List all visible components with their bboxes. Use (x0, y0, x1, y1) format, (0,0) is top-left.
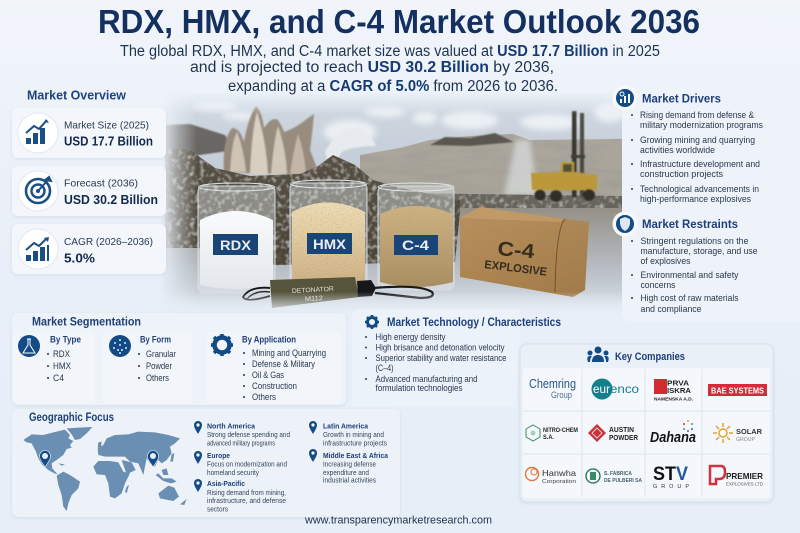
logo: Premier Explosives: EXPLOSIVES LTD (726, 482, 764, 486)
subtitle text block: and is projected to reach USD 30.2 Billion by 2036, (190, 59, 554, 76)
card: by type (13, 332, 95, 403)
card: by application: Defense & Military (252, 359, 315, 369)
logo: STV Group: G R O U P (653, 484, 689, 490)
panel: drivers and restraints (612, 86, 800, 322)
card: market size (12, 108, 166, 158)
logo: Hanwha: Corporation (542, 479, 576, 485)
region list: right column: infrastructure projects (323, 440, 387, 448)
logo: Prva Iskra: ISKRA (667, 388, 691, 395)
card: by form: Granular (146, 349, 176, 359)
subtitle text block: The global RDX, HMX, and C-4 market size was valued at USD 17.7 Billion in 2025 (120, 43, 660, 60)
panel: market overview (12, 88, 166, 274)
region list: left column: Europe (207, 451, 230, 460)
drill rig (531, 111, 597, 202)
card: forecast: Forecast (2036) (64, 178, 138, 190)
logo: Prva Iskra (654, 379, 693, 402)
list: market drivers (631, 110, 763, 204)
jar: RDX: RDX (220, 238, 251, 253)
logo: Hanwha (526, 468, 576, 485)
panel: key companies (520, 344, 773, 502)
card: by application: Mining and Quarrying (252, 348, 326, 358)
region list: left column: sectors (207, 506, 228, 514)
logo: Solar Group: GROUP (736, 437, 755, 443)
logo: Dahana (650, 420, 696, 446)
card: forecast: USD 30.2 Billion (64, 192, 158, 207)
card: cagr (12, 224, 166, 274)
logo: Austin Powder (588, 424, 639, 442)
heading: market technology: Market Technology / Characteristics (387, 315, 561, 329)
card: by application: Construction (252, 381, 297, 391)
list: technologies: formulation technologies (376, 383, 463, 393)
subtitle text block: expanding at a CAGR of 5.0% from 2026 to 2036. (228, 78, 558, 95)
world map (23, 427, 187, 511)
card: by application (206, 332, 342, 403)
list: technologies: Superior stability and water resistance (376, 353, 506, 363)
detonator M112: M112 (305, 295, 324, 303)
heading: market segmentation: Market Segmentation (32, 315, 141, 329)
logo: STV Group: STV (653, 464, 688, 485)
logo: S. Fabrica (586, 469, 642, 484)
region list: left column: Strong defense spending and (207, 432, 290, 439)
list: market drivers: activities worldwide (640, 145, 715, 155)
card: market size: USD 17.7 Billion (64, 134, 153, 149)
logo: Premier Explosives (710, 466, 764, 486)
region list: left column (194, 421, 290, 514)
heading: market overview: Market Overview (27, 88, 126, 102)
logo: Austin Powder: POWDER (609, 433, 639, 442)
card: by form: By Form (140, 335, 171, 346)
list: market drivers: Technological advancements in (640, 184, 759, 194)
card: by type: RDX (53, 349, 70, 359)
list: market restraints: Stringent regulations on the (640, 236, 748, 246)
detonator M112 (243, 277, 433, 308)
logo: Chemring: Chemring (529, 376, 576, 391)
C-4 explosive bag: C-4 (497, 238, 536, 263)
list: market restraints: of explosives (640, 256, 691, 266)
card: forecast (12, 166, 166, 216)
jar: HMX (290, 180, 367, 291)
dust column (504, 140, 538, 196)
card: by application: Oil & Gas (252, 370, 284, 380)
jar: RDX (198, 183, 275, 293)
logo: Solar Group (713, 423, 763, 443)
logo: Prva Iskra: PRVA (667, 380, 689, 388)
heading: geographic focus: Geographic Focus (29, 410, 114, 424)
list: market restraints: High cost of raw materials (640, 293, 739, 303)
logo: Nitro-Chem: S.A. (543, 434, 554, 441)
jar: C-4 (378, 183, 454, 290)
icon: market restraints (612, 212, 638, 236)
card: cagr: CAGR (2026–2036) (64, 236, 153, 248)
icon: people (587, 346, 609, 362)
logo: Hanwha: Hanwha (542, 468, 576, 478)
panel: market technology (352, 310, 561, 407)
region list: left column: North America (207, 422, 256, 431)
list: market drivers: Growing mining and quarrying (640, 135, 755, 145)
card: by form (103, 332, 192, 403)
C-4 explosive bag (460, 207, 589, 297)
ground (150, 208, 630, 314)
region list: left column: Asia-Pacific (207, 479, 245, 488)
logo: Solar Group: SOLAR (736, 427, 763, 436)
logo: Eurenco: eur (593, 384, 610, 396)
card: by application: Others (252, 392, 276, 402)
region list: right column: Increasing defense (323, 462, 376, 469)
logo: Premier Explosives: PREMIER (726, 471, 763, 481)
region list: right column: Middle East & Africa (323, 451, 389, 460)
heading: market restraints: Market Restraints (642, 217, 738, 231)
logo: S. Fabrica: S. FABRICA (604, 471, 632, 477)
list: market restraints (631, 236, 758, 314)
list: technologies: High brisance and detonation velocity (376, 342, 505, 352)
list: market restraints: concerns (640, 280, 676, 290)
heading: key companies: Key Companies (615, 351, 685, 363)
list: market restraints: Environmental and safety (640, 270, 739, 280)
quarry floor (426, 193, 622, 208)
region list: right column: expenditure and (323, 470, 369, 477)
icon: gear (365, 315, 379, 329)
map pins (40, 451, 158, 467)
subtitle text block (120, 43, 660, 95)
footer url: www.transparencymarketresearch.com (304, 514, 492, 526)
list: market drivers: military modernization programs (640, 120, 763, 130)
logo: Chemring (529, 376, 576, 400)
region list: left column: Rising demand from mining, (207, 490, 286, 497)
list: technologies: (C–4) (376, 363, 394, 373)
card: by type: By Type (50, 335, 81, 346)
region list: left column: infrastructure, and defense (207, 498, 286, 505)
card: by application: By Application (242, 335, 296, 346)
card: cagr: 5.0% (64, 251, 95, 266)
card: by form: Powder (146, 361, 172, 371)
region list: right column (309, 421, 389, 484)
logo grid (523, 368, 770, 498)
list: technologies: Advanced manufacturing and (376, 374, 478, 384)
logo: Eurenco: enco (610, 382, 639, 396)
card: market size: Market Size (2025) (64, 120, 149, 132)
logo: S. Fabrica: DE PULBERI SA (604, 478, 642, 484)
logo: Prva Iskra: NAMENSKA A.D. (654, 396, 693, 402)
logo: BAE Systems: BAE SYSTEMS (711, 386, 764, 396)
icon: market drivers (612, 86, 638, 110)
heading: market drivers: Market Drivers (642, 92, 721, 106)
detonator M112: DETONATOR (292, 286, 334, 295)
far ridge left (166, 123, 228, 156)
card: by form: Others (146, 373, 169, 383)
region list: right column: industrial activities (323, 478, 376, 484)
list: market drivers: construction projects (640, 169, 723, 179)
list: market restraints: and compliance (640, 304, 702, 314)
region list: left column: Focus on modernization and (207, 462, 287, 469)
card: by type: HMX (53, 361, 71, 371)
logo: Chemring: Group (551, 390, 572, 400)
region list: right column: Latin America (323, 422, 369, 431)
panel: market segmentation (12, 313, 346, 405)
region list: right column: Growth in mining and (323, 432, 384, 439)
list: market drivers: high-performance explosives (640, 194, 751, 204)
list: market drivers: Infrastructure development and (640, 159, 760, 169)
region list: left column: advanced military programs (207, 440, 275, 448)
title: RDX, HMX, and C-4 Market Outlook 2036 (98, 3, 700, 40)
logo: Nitro-Chem (526, 425, 578, 441)
card: by type: C4 (53, 373, 64, 383)
logo: Eurenco (592, 378, 639, 400)
region list: left column: homeland security (207, 470, 259, 477)
explosion plume (224, 106, 376, 176)
tree line (430, 133, 514, 146)
panel: geographic focus (12, 409, 400, 517)
jar: C-4: C-4 (402, 238, 430, 253)
hero photo: mine scene with jars (150, 92, 630, 314)
logo: Dahana: Dahana (650, 429, 696, 446)
background: quarry terraces (360, 134, 622, 196)
list: technologies (365, 332, 506, 393)
logo: Austin Powder: AUSTIN (609, 425, 634, 434)
list: technologies: High energy density (376, 332, 446, 342)
C-4 explosive bag: EXPLOSIVE (484, 259, 548, 279)
jar: HMX: HMX (313, 237, 346, 252)
foreground dirt mound (165, 148, 460, 265)
list: market restraints: manufacture, storage, and use (640, 246, 758, 256)
logo: Nitro-Chem: NITRO-CHEM (543, 427, 578, 434)
list: market drivers: Rising demand from defense & (640, 110, 755, 120)
